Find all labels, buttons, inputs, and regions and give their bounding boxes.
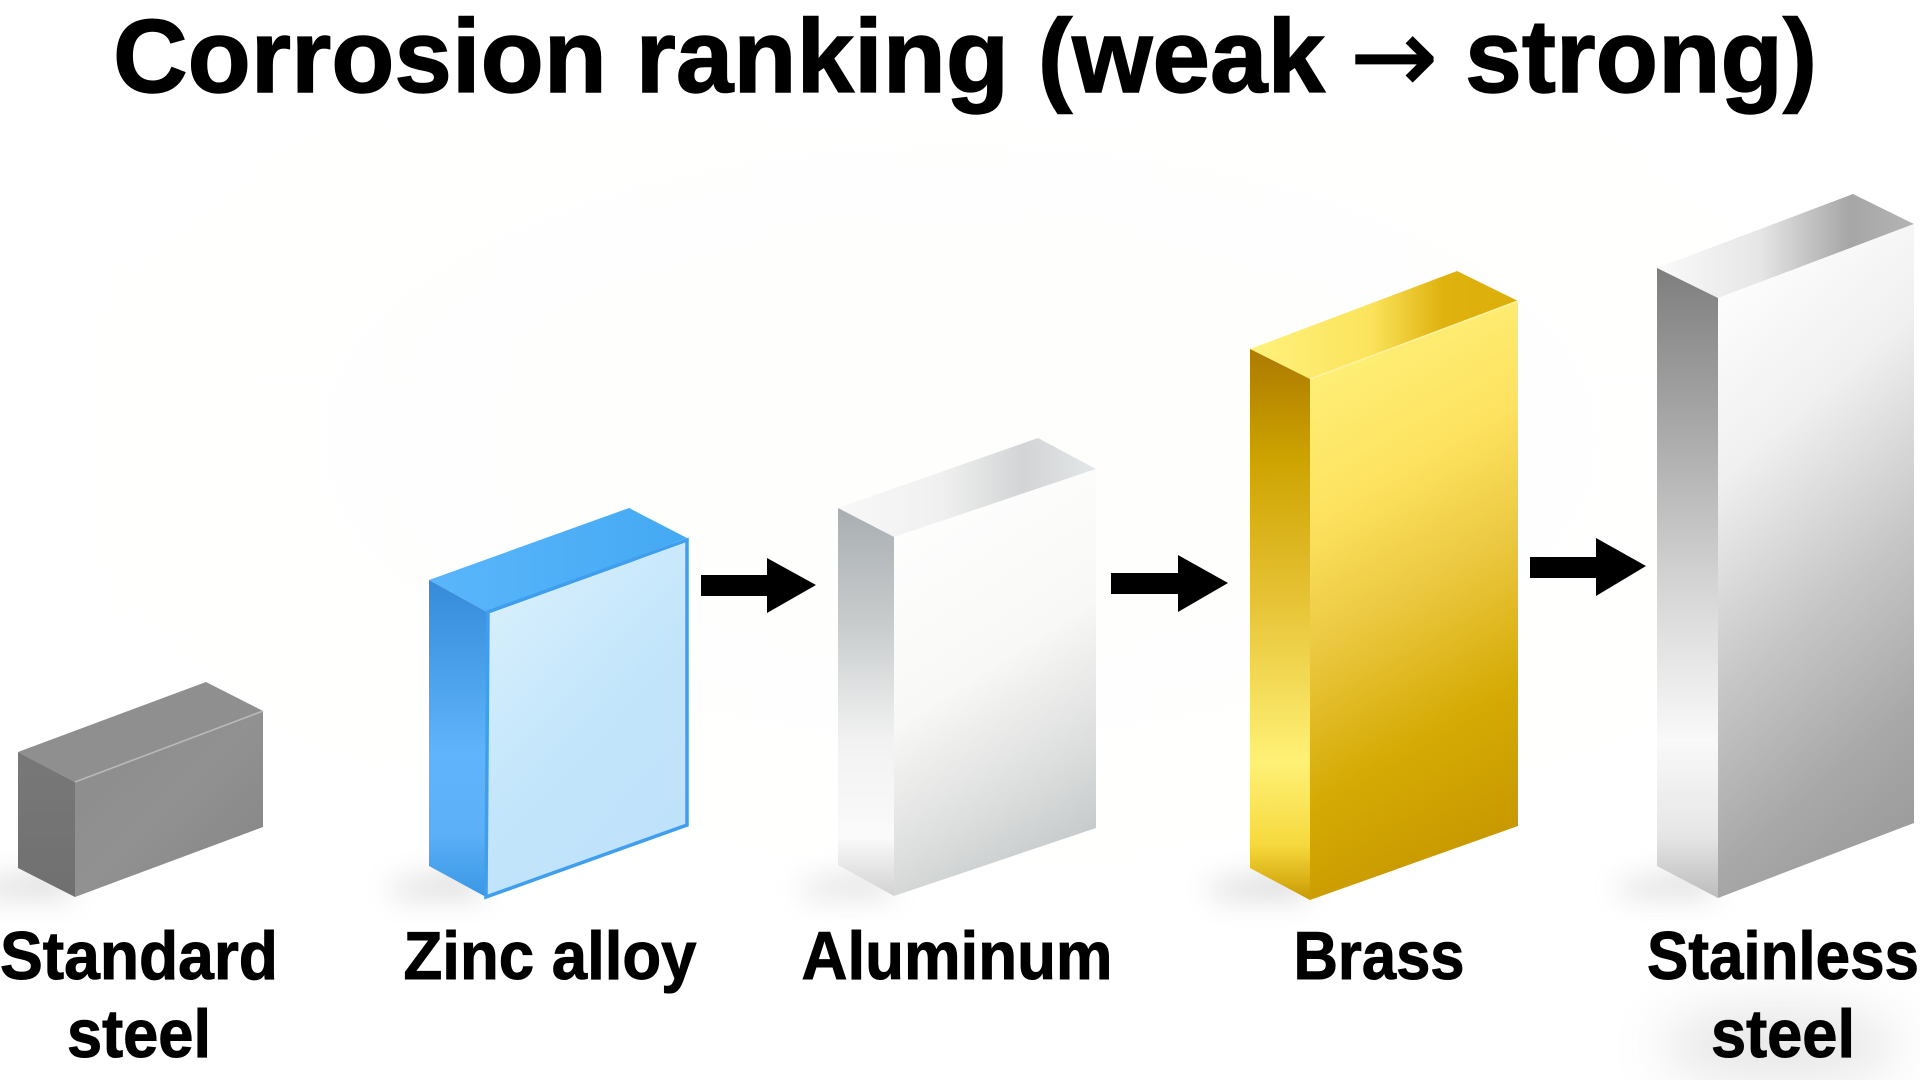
label: stainless steel: steel (1711, 996, 1855, 1072)
title: strong) (1465, 0, 1817, 115)
label: zinc alloy: Zinc alloy (404, 918, 697, 994)
arrow: zinc to aluminum (701, 558, 816, 613)
block: zinc alloy (385, 508, 687, 897)
label: aluminum: Aluminum (802, 918, 1112, 994)
block: aluminum (795, 438, 1096, 897)
block: standard steel (0, 682, 263, 897)
arrow: aluminum to brass (1111, 555, 1228, 612)
arrow: brass to stainless steel (1530, 538, 1646, 596)
block: brass (1205, 271, 1518, 900)
title: Corrosion ranking (weak (113, 0, 1325, 115)
label: brass: Brass (1294, 918, 1464, 994)
label: stainless steel (1647, 918, 1919, 1072)
label: standard steel: Standard (0, 918, 278, 994)
label: standard steel: steel (67, 996, 211, 1072)
block: stainless steel (1612, 194, 1914, 898)
label: standard steel (0, 918, 278, 1072)
